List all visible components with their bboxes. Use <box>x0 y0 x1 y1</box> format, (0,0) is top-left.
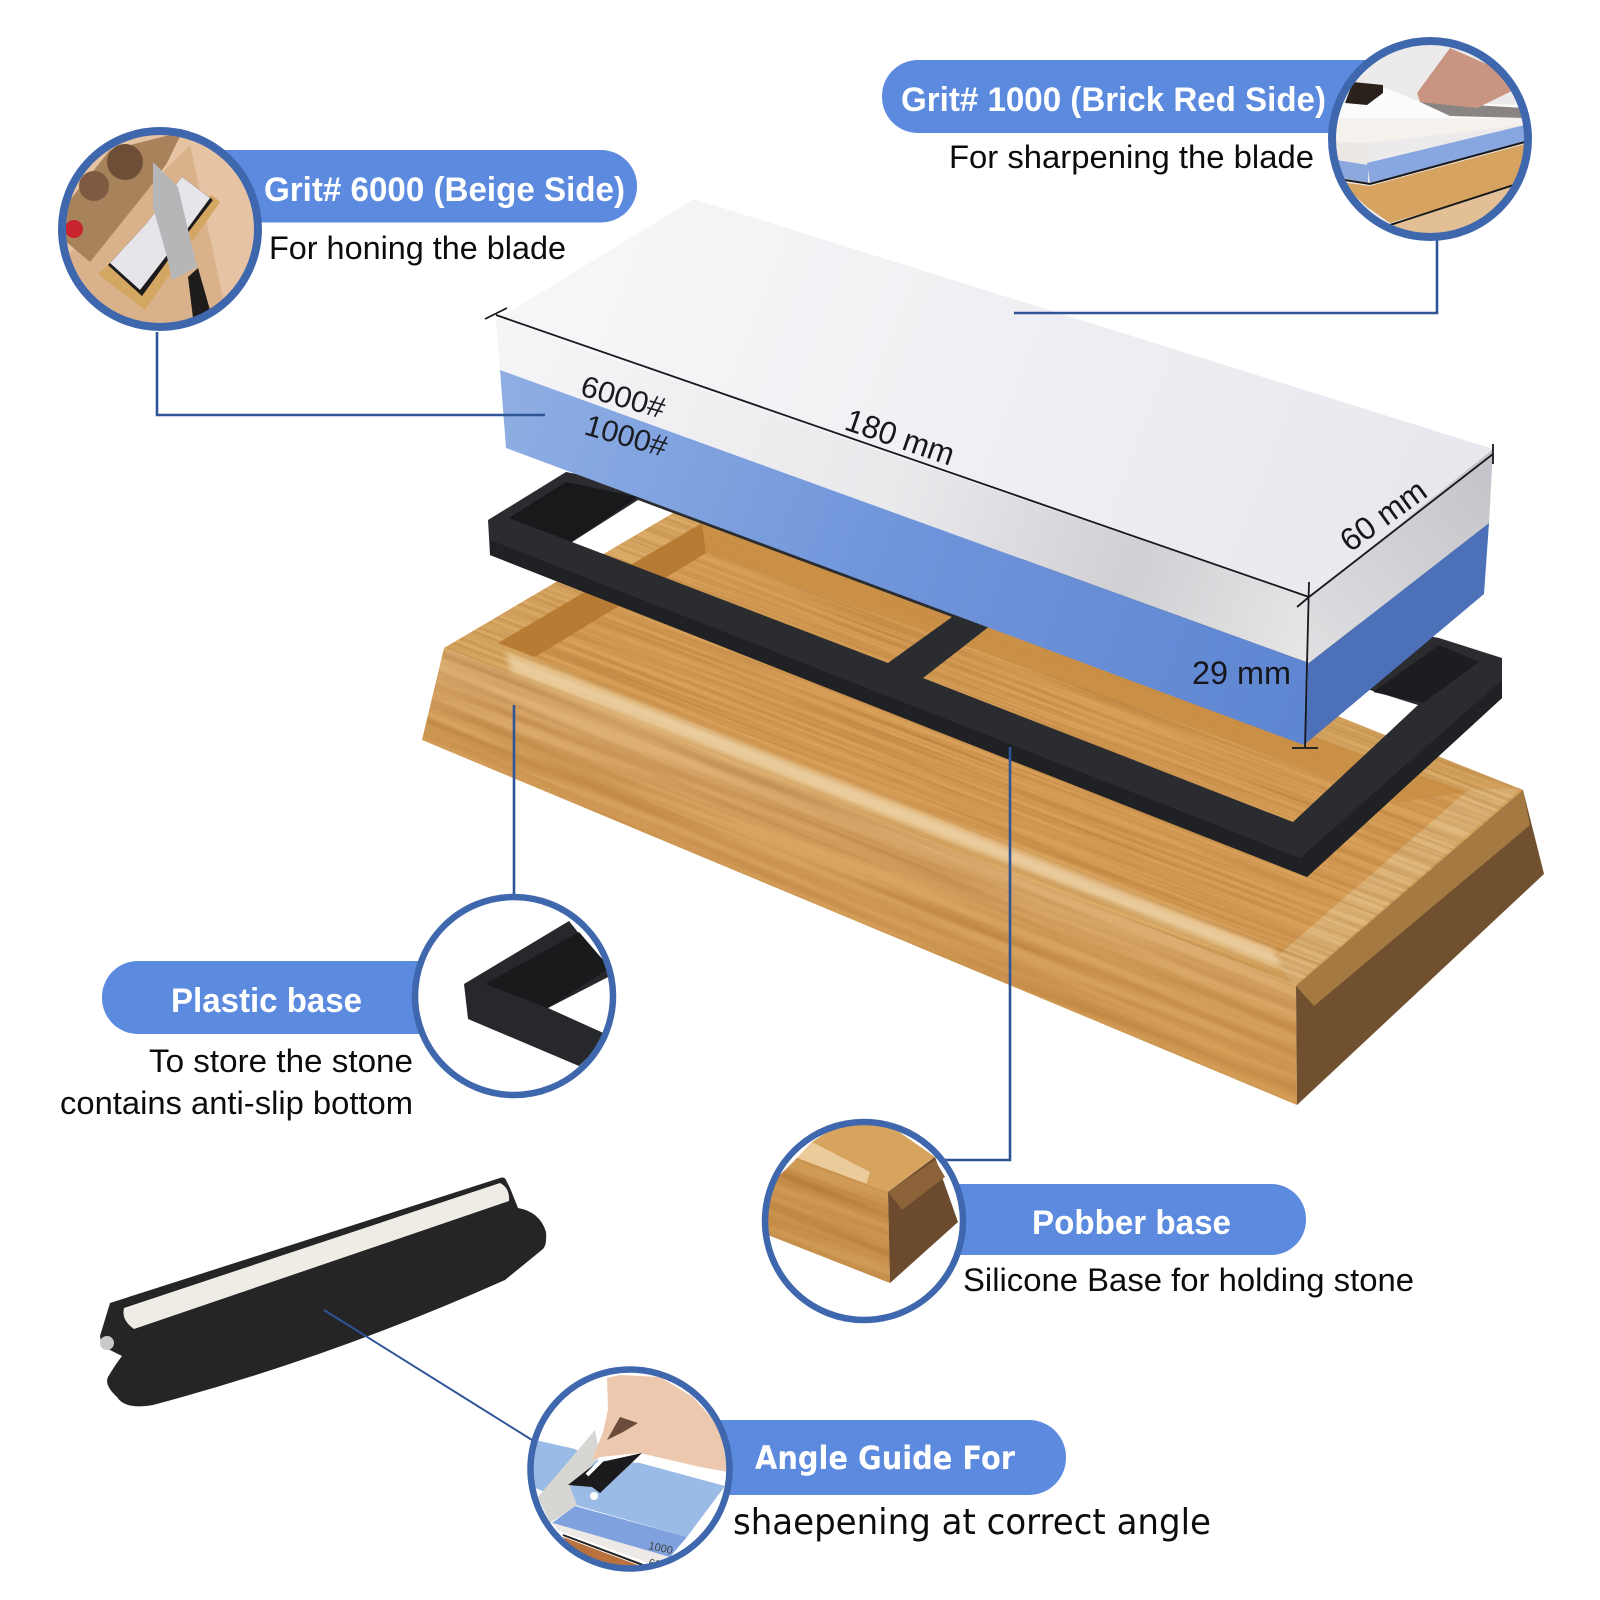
connector: grit 1000 <box>1014 236 1437 313</box>
icon: guide in use photo: 1000 <box>647 1540 674 1557</box>
pill: plastic base <box>102 961 502 1034</box>
callout: grit 1000 <box>882 37 1532 245</box>
ceramic rod <box>123 1183 509 1329</box>
heading: grit 6000: Grit# 6000 (Beige Side) <box>264 171 625 209</box>
callout: plastic base <box>60 892 618 1121</box>
pill: angle guide <box>660 1420 1066 1495</box>
connector: plastic base <box>513 705 515 895</box>
stone blue end <box>1304 523 1489 745</box>
stone white front <box>496 320 1309 663</box>
whetstone <box>496 199 1493 745</box>
pill: grit 1000 <box>882 60 1442 133</box>
icon: bamboo corner <box>768 1125 960 1283</box>
connector: pobber base <box>945 747 1010 1160</box>
connector: grit 6000 <box>157 332 545 415</box>
grit label 1000: 1000# <box>581 409 671 464</box>
rod end cap <box>100 1336 114 1350</box>
pill: pobber base <box>860 1184 1306 1255</box>
black rubber frame <box>488 472 1502 877</box>
text: anti-slip bottom: contains anti-slip bottom <box>60 1085 413 1121</box>
connector: angle guide <box>324 1310 532 1440</box>
icon: guide in use photo: 600 <box>647 1557 668 1573</box>
icon: knife on stone photo <box>66 135 254 323</box>
dimension: 180 mm: 180 mm <box>841 402 959 472</box>
text: store the stone: To store the stone <box>149 1043 413 1079</box>
icon: guide in use photo <box>534 1375 726 1566</box>
callout: grit 6000 <box>58 127 637 331</box>
grit label 6000: 6000# <box>577 370 669 426</box>
angle guide product <box>100 1178 546 1406</box>
stone blue front <box>500 370 1309 745</box>
stone white end <box>1309 449 1493 663</box>
callout: pobber base <box>762 1118 1413 1324</box>
bamboo tray <box>422 513 1544 1105</box>
text: sharpening: For sharpening the blade <box>949 139 1314 175</box>
heading: plastic base: Plastic base <box>171 982 362 1020</box>
pill: grit 6000 <box>120 150 637 222</box>
text: correct angle: shaepening at correct angle <box>733 1502 1211 1543</box>
callout: angle guide <box>527 1366 1211 1580</box>
heading: pobber base: Pobber base <box>1032 1204 1231 1242</box>
icon: sharpening photo <box>1336 45 1524 233</box>
heading: angle guide: Angle Guide For <box>755 1439 1015 1477</box>
stone top face <box>496 199 1493 597</box>
dimension: 60 mm: 60 mm <box>1333 472 1433 559</box>
dimension: 29 mm: 29 mm <box>1192 655 1291 691</box>
guide body <box>100 1178 546 1406</box>
dimension lines <box>485 308 1493 748</box>
text: honing: For honing the blade <box>269 230 566 266</box>
text: silicone base: Silicone Base for holding stone <box>963 1262 1414 1298</box>
icon: plastic frame corner <box>418 921 608 1066</box>
heading: grit 1000: Grit# 1000 (Brick Red Side) <box>901 81 1326 119</box>
